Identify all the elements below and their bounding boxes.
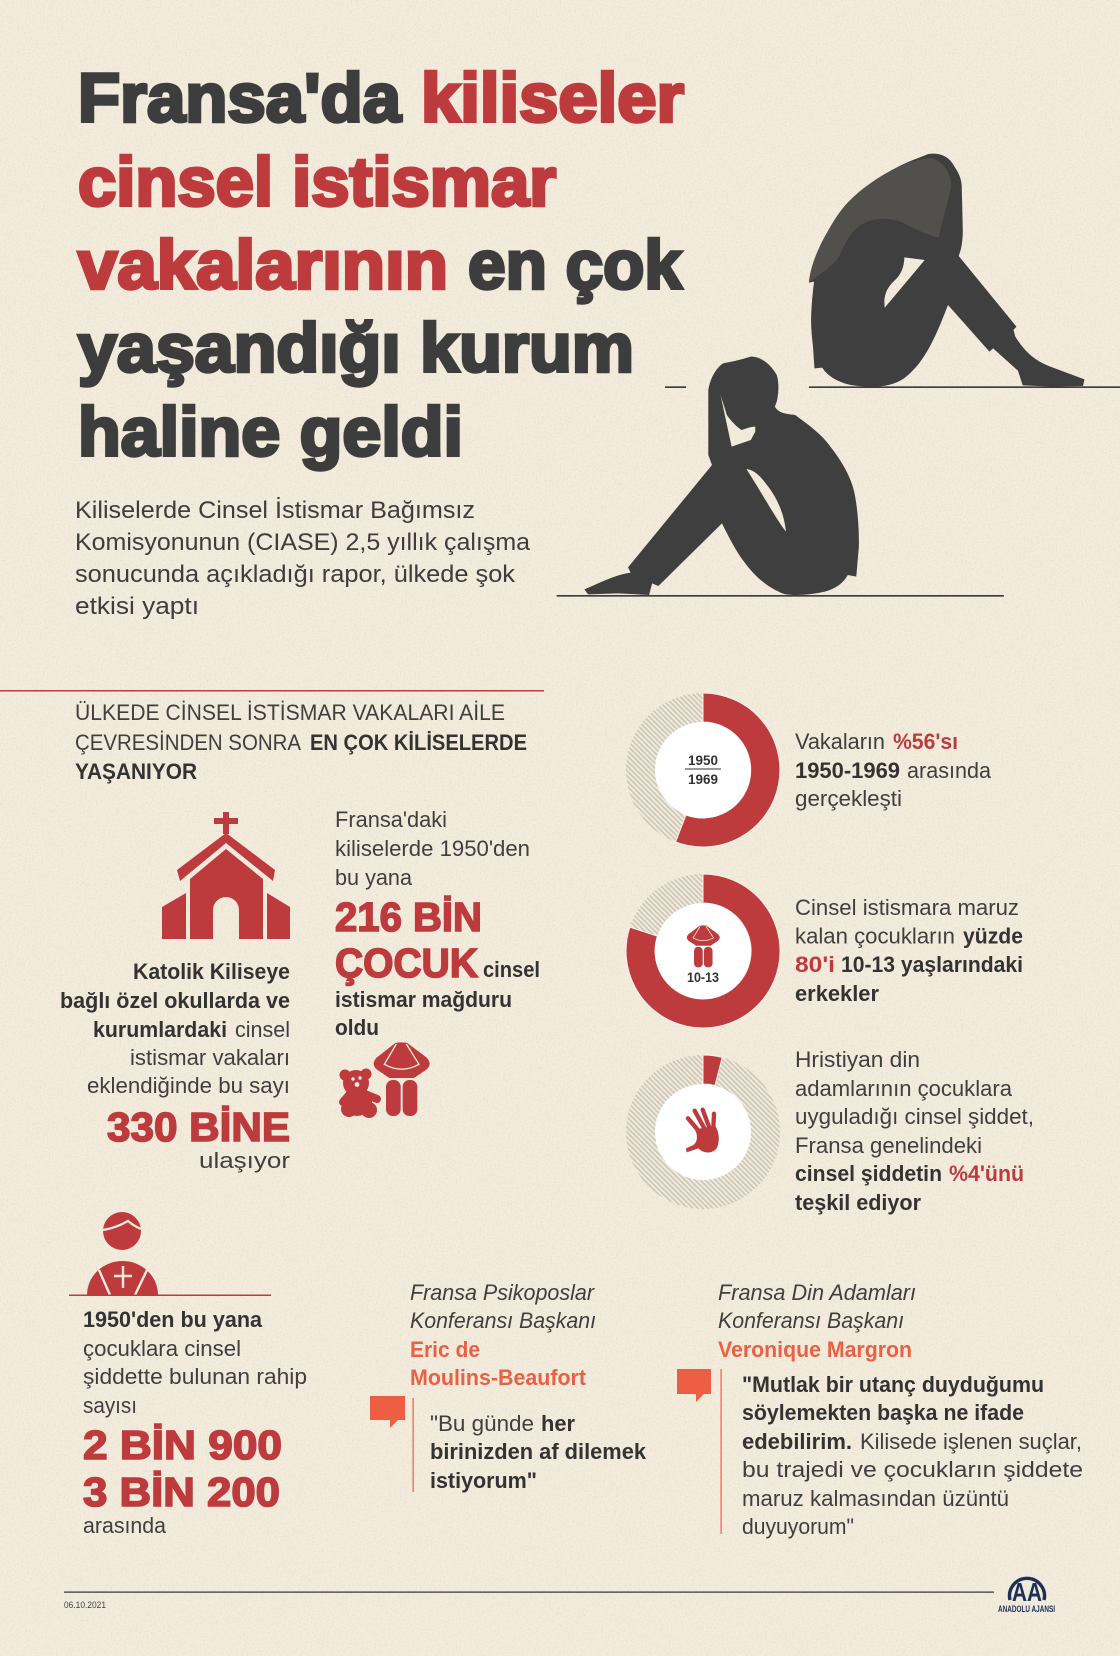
text block: 330 bine: cinsel [235,1017,290,1042]
text block: 330 bine [60,959,290,1173]
text: 4 percent: Hristiyan din [795,1047,920,1072]
text: 80 percent: 10-13 yaşlarındaki [841,952,1023,977]
text: 56 percent: 1950-1969 [795,758,900,783]
icon: priest [69,1212,271,1296]
quote: Eric de Moulins-Beaufort: Eric de [410,1337,480,1362]
section heading: ÜLKEDE CİNSEL İSTİSMAR VAKALARI AİLE [75,700,505,725]
date: 06.10.2021 [64,1600,106,1610]
text block: priests: 2 BİN 900 [83,1422,282,1468]
text block: 330 bine: 330 BİNE [107,1104,290,1150]
text block: priests: 1950'den bu yana [83,1307,263,1332]
text block: 216 bin cocuk: oldu [335,1015,379,1040]
text: 56 percent: gerçekleşti [795,786,902,811]
text: 80 percent: kalan çocukların [795,924,955,948]
title: vakalarının [78,226,448,304]
text block: priests [83,1307,307,1538]
text block: 216 bin cocuk: istismar mağduru [335,987,512,1012]
text: 56 percent: %56'sı [893,729,958,754]
donut chart: 80% ages 10-13: 10-13 [687,969,719,985]
text block: priests: çocuklara cinsel [83,1336,241,1361]
quote: Eric de Moulins-Beaufort: Fransa Psikoposlar [410,1280,596,1305]
title [78,60,684,470]
text block: 216 bin cocuk: cinsel [483,957,540,982]
quote: Veronique Margron: maruz kalmasından üzüntü [742,1486,1009,1511]
text block: 330 bine: ulaşıyor [199,1148,290,1173]
donut chart: 80% ages 10-13 [626,874,780,1028]
text: 80 percent: erkekler [795,981,879,1006]
quote: Veronique Margron: Fransa Din Adamları [718,1280,916,1305]
section heading [75,700,527,784]
subtitle: Kiliselerde Cinsel İstismar Bağımsız [75,497,475,524]
title: haline geldi [78,394,463,470]
text: 4 percent: cinsel şiddetin [795,1161,942,1186]
text block: 216 bin cocuk: bu yana [335,865,413,890]
text block: priests: 3 BİN 200 [83,1469,280,1515]
quote: Eric de Moulins-Beaufort: Moulins-Beaufort [410,1365,587,1390]
quote: Eric de Moulins-Beaufort: istiyorum" [430,1468,537,1493]
title: en çok [468,226,683,304]
text block: priests: sayısı [83,1393,137,1418]
title: cinsel istismar [78,144,556,220]
quote: Veronique Margron: Konferansı Başkanı [718,1308,904,1333]
text: 4 percent: uyguladığı cinsel şiddet, [795,1104,1034,1129]
text: 80 percent: yüzde [963,924,1023,948]
text block: 330 bine: istismar vakaları [130,1045,290,1070]
title: Fransa'da [78,60,402,136]
text: 4 percent: Fransa genelindeki [795,1133,982,1158]
text block: 216 bin cocuk: 216 BİN [335,894,482,940]
quote: Veronique Margron: edebilirim. [742,1429,852,1454]
subtitle: etkisi yaptı [75,593,199,620]
logo: Anadolu Ajansi [998,1577,1055,1615]
logo: Anadolu Ajansi: AA [1012,1577,1042,1607]
text block: 330 bine: kurumlardaki [93,1017,227,1042]
title: kiliseler [421,60,684,136]
text block: 216 bin cocuk: Fransa'daki [335,807,447,832]
text block: priests: şiddette bulunan rahip [83,1364,307,1389]
subtitle [75,497,531,620]
quote: Veronique Margron: duyuyorum" [742,1514,854,1539]
quote: Veronique Margron: söylemekten başka ne ifade [742,1400,1024,1425]
quote: Veronique Margron: Veronique Margron [718,1337,912,1362]
text: 56 percent: arasında [907,758,992,783]
subtitle: sonucunda açıkladığı rapor, ülkede şok [75,561,516,588]
quote: Veronique Margron: "Mutlak bir utanç duyduğumu [742,1372,1044,1397]
text block: 330 bine: bağlı özel okullarda ve [60,988,290,1013]
text: 4 percent [795,1047,1034,1215]
text: 80 percent: 80'i [795,952,835,977]
donut chart: 4% clergy violence [626,1055,780,1209]
footer rule [64,1592,994,1593]
quote: Veronique Margron: Kilisede işlenen suçlar, [860,1429,1082,1454]
icon: child and teddy bear [340,1042,430,1118]
title: yaşandığı kurum [78,310,634,386]
text block: 330 bine: Katolik Kiliseye [133,959,290,984]
text block: 330 bine: eklendiğinde bu sayı [87,1073,290,1098]
text block: 216 bin cocuk [335,807,540,1040]
quote: Eric de Moulins-Beaufort: her [541,1411,575,1436]
section heading: ÇEVRESİNDEN SONRA [75,730,301,755]
illustration: two seated silhouettes [557,154,1120,597]
text block: 216 bin cocuk: ÇOCUK [335,940,478,986]
text: 56 percent [795,729,992,811]
subtitle: Komisyonunun (CIASE) 2,5 yıllık çalışma [75,529,531,556]
section heading: EN ÇOK KİLİSELERDE [310,730,527,755]
text: 56 percent: Vakaların [795,729,885,754]
quote: Eric de Moulins-Beaufort: "Bu günde [430,1411,534,1436]
text: 4 percent: adamlarının çocuklara [795,1076,1013,1101]
logo: Anadolu Ajansi: ANADOLU AJANSI [998,1604,1055,1615]
quote: Eric de Moulins-Beaufort: Konferansı Başkanı [410,1308,596,1333]
donut chart: 56% 1950-1969 [626,693,780,847]
text block: 216 bin cocuk: kiliselerde 1950'den [335,836,530,861]
quote: Eric de Moulins-Beaufort [370,1280,647,1493]
donut chart: 56% 1950-1969: 1950 [688,752,718,768]
section heading: YAŞANIYOR [75,759,197,784]
quote: Eric de Moulins-Beaufort: birinizden af dilemek [430,1439,647,1464]
text: 80 percent [795,895,1023,1006]
text: 80 percent: Cinsel istismara maruz [795,895,1019,920]
quote: Veronique Margron: bu trajedi ve çocukların şiddete [742,1457,1083,1482]
section rule [0,690,544,692]
donut chart: 56% 1950-1969: 1969 [688,771,718,787]
text block: priests: arasında [83,1513,167,1538]
text: 4 percent: %4'ünü [949,1161,1024,1186]
icon: church [162,812,290,939]
text: 4 percent: teşkil ediyor [795,1190,921,1215]
quote: Veronique Margron [677,1280,1083,1539]
